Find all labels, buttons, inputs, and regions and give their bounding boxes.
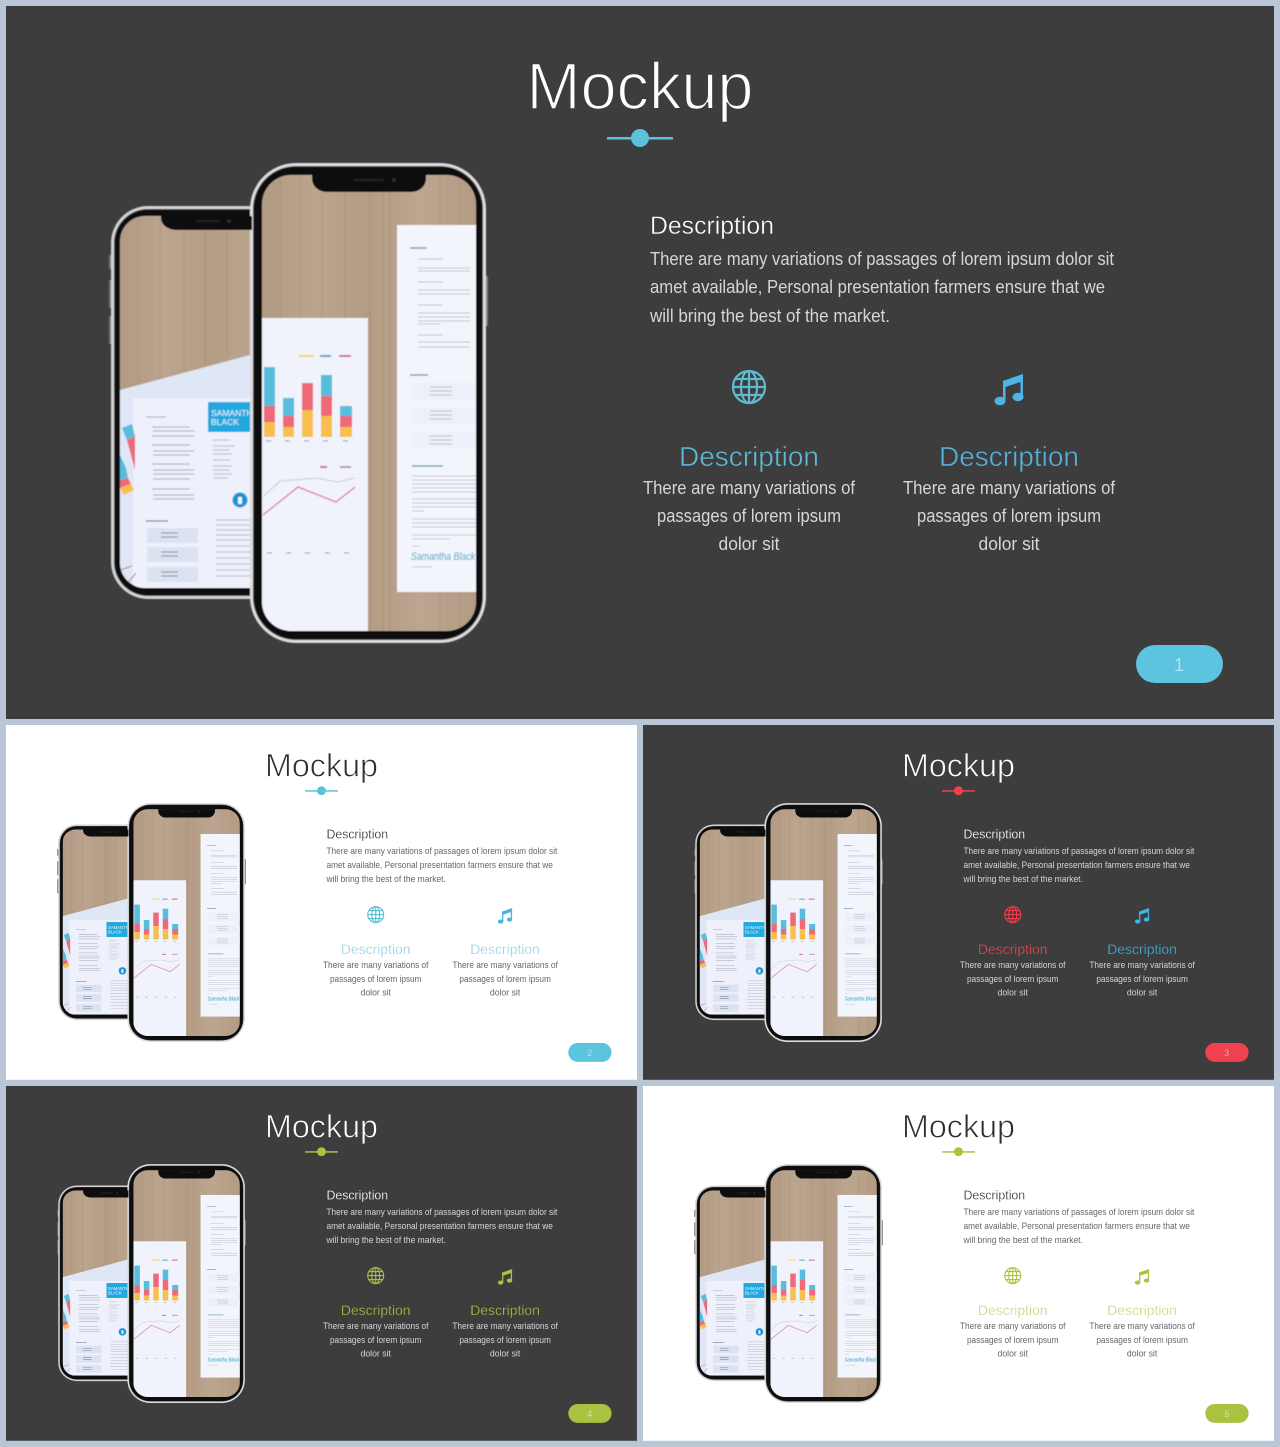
panel: slide 4 dark green — [6, 1086, 637, 1441]
icon: music note — [1135, 1269, 1149, 1285]
left column text: passages of lorem ipsum — [330, 974, 421, 984]
left column text: There are many variations of — [323, 960, 429, 970]
page number pill: 4 — [587, 1409, 592, 1419]
right column text — [1089, 1321, 1195, 1359]
left column text: passages of lorem ipsum — [330, 1335, 421, 1345]
right column heading: Description — [470, 941, 540, 957]
icon: music note — [1135, 908, 1149, 924]
phone mockups — [694, 803, 883, 1042]
divider with dot — [305, 786, 338, 795]
description text: amet available, Personal presentation farmers ensure that we — [326, 860, 553, 870]
description text: There are many variations of passages of lorem ipsum dolor sit — [326, 1207, 558, 1217]
icon: globe — [733, 371, 765, 403]
divider with dot — [942, 786, 975, 795]
right column text — [452, 1321, 558, 1359]
description text: will bring the best of the market. — [649, 306, 890, 326]
page number pill: 1 — [1174, 655, 1184, 675]
page number pill: 2 — [587, 1048, 592, 1058]
left column heading: Description — [341, 941, 411, 957]
right column text: There are many variations of — [903, 478, 1116, 498]
title: Mockup — [265, 1107, 378, 1144]
description text: will bring the best of the market. — [963, 874, 1083, 884]
page number pill — [568, 1404, 612, 1423]
right column text: passages of lorem ipsum — [459, 974, 551, 984]
right column heading: Description — [1107, 1302, 1177, 1318]
description text — [326, 1207, 558, 1245]
page number pill — [1136, 645, 1223, 683]
left column text — [323, 1321, 429, 1359]
icon: music note — [994, 374, 1024, 405]
page number pill — [568, 1043, 612, 1062]
title: Mockup — [902, 1107, 1015, 1144]
phone mockups — [109, 163, 488, 643]
right column text: There are many variations of — [452, 960, 558, 970]
description text — [649, 249, 1114, 326]
right column text: passages of lorem ipsum — [1096, 1335, 1188, 1345]
left column text: dolor sit — [361, 1349, 391, 1359]
title: Mockup — [902, 746, 1015, 783]
right column text: dolor sit — [490, 988, 521, 998]
description text: will bring the best of the market. — [963, 1235, 1083, 1245]
right column text — [903, 478, 1116, 554]
left column text: passages of lorem ipsum — [967, 974, 1058, 984]
description text: amet available, Personal presentation farmers ensure that we — [963, 860, 1190, 870]
left column heading: Description — [341, 1302, 411, 1318]
description text: amet available, Personal presentation farmers ensure that we — [963, 1221, 1190, 1231]
icon: globe — [1005, 1268, 1021, 1284]
panel: slide 5 white green — [643, 1086, 1274, 1441]
left column heading: Description — [679, 441, 819, 472]
title: Mockup — [526, 49, 754, 123]
left column text — [323, 960, 429, 998]
description heading: Description — [326, 827, 388, 841]
page number pill — [1205, 1404, 1249, 1423]
right column text: dolor sit — [1127, 1349, 1158, 1359]
icon: globe — [368, 907, 384, 923]
left column text: There are many variations of — [643, 478, 856, 498]
right column heading: Description — [1107, 941, 1177, 957]
description text: There are many variations of passages of lorem ipsum dolor sit — [963, 1207, 1195, 1217]
left column text: dolor sit — [718, 534, 780, 554]
left column text — [643, 478, 856, 554]
description text — [963, 846, 1195, 884]
right column text: passages of lorem ipsum — [459, 1335, 551, 1345]
left column text: There are many variations of — [960, 960, 1066, 970]
left column heading: Description — [978, 1302, 1048, 1318]
description heading: Description — [963, 1188, 1025, 1202]
right column text — [452, 960, 558, 998]
right column text: dolor sit — [490, 1349, 521, 1359]
left column text — [960, 960, 1066, 998]
right column text: passages of lorem ipsum — [917, 506, 1101, 526]
panel: slide 3 dark red — [643, 725, 1274, 1080]
left column text: dolor sit — [998, 1349, 1028, 1359]
phone mockups — [57, 803, 246, 1042]
description text — [963, 1207, 1195, 1245]
right column text: passages of lorem ipsum — [1096, 974, 1188, 984]
right column text: dolor sit — [1127, 988, 1158, 998]
icon: music note — [498, 1269, 512, 1285]
divider with dot — [942, 1147, 975, 1156]
description text: There are many variations of passages of lorem ipsum dolor sit — [963, 846, 1195, 856]
phone mockups — [694, 1164, 883, 1403]
description text: There are many variations of passages of lorem ipsum dolor sit — [650, 249, 1114, 269]
description text: amet available, Personal presentation farmers ensure that we — [326, 1221, 553, 1231]
icon: music note — [498, 908, 512, 924]
left column text: passages of lorem ipsum — [657, 506, 841, 526]
description text — [326, 846, 558, 884]
divider with dot — [305, 1147, 338, 1156]
description text: will bring the best of the market. — [326, 874, 446, 884]
page number pill: 5 — [1224, 1409, 1229, 1419]
description text: will bring the best of the market. — [326, 1235, 446, 1245]
page number pill: 3 — [1224, 1048, 1229, 1058]
left column text — [960, 1321, 1066, 1359]
right column heading: Description — [470, 1302, 540, 1318]
right column heading: Description — [939, 441, 1079, 472]
panel: slide 1 large dark — [6, 6, 1274, 719]
left column text: There are many variations of — [960, 1321, 1066, 1331]
description heading: Description — [326, 1188, 388, 1202]
divider with dot — [607, 129, 673, 147]
right column text: There are many variations of — [1089, 1321, 1195, 1331]
phone mockups — [57, 1164, 246, 1403]
description text: There are many variations of passages of lorem ipsum dolor sit — [326, 846, 558, 856]
description heading: Description — [963, 827, 1025, 841]
title: Mockup — [265, 746, 378, 783]
left column text: dolor sit — [361, 988, 391, 998]
left column text: passages of lorem ipsum — [967, 1335, 1058, 1345]
panel: slide 2 white blue — [6, 725, 637, 1080]
left column text: There are many variations of — [323, 1321, 429, 1331]
right column text: There are many variations of — [1089, 960, 1195, 970]
right column text: There are many variations of — [452, 1321, 558, 1331]
left column text: dolor sit — [998, 988, 1028, 998]
right column text: dolor sit — [978, 534, 1040, 554]
left column heading: Description — [978, 941, 1048, 957]
icon: globe — [1005, 907, 1021, 923]
page number pill — [1205, 1043, 1249, 1062]
description text: amet available, Personal presentation farmers ensure that we — [650, 277, 1105, 297]
icon: globe — [368, 1268, 384, 1284]
description heading: Description — [650, 212, 774, 240]
right column text — [1089, 960, 1195, 998]
